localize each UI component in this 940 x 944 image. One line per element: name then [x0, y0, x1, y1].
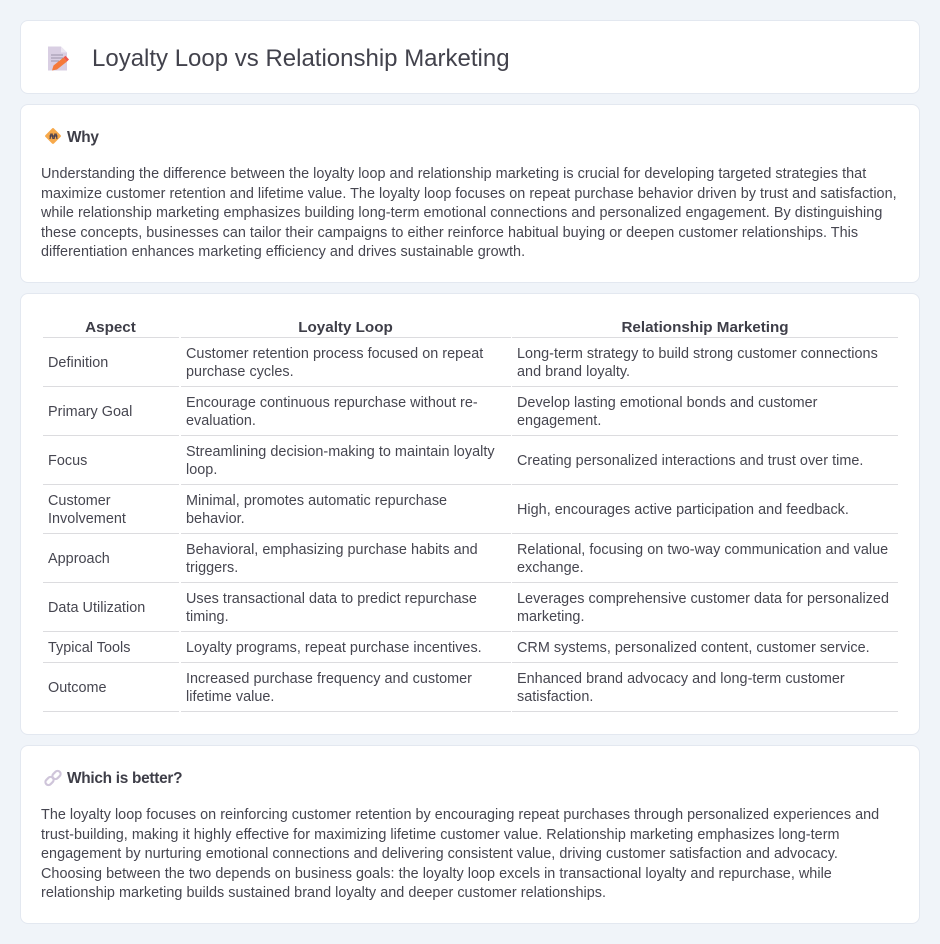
panel: comparison table: evaluation. [186, 413, 256, 429]
panel: comparison table: Increased purchase frequency and customer [186, 671, 472, 687]
row: approach: Approach [48, 551, 110, 567]
panel: comparison table: Uses transactional data to predict repurchase [186, 591, 477, 607]
panel: comparison table: Develop lasting emotional bonds and customer [517, 395, 818, 411]
panel: comparison table: Leverages comprehensive customer data for personalized [517, 591, 889, 607]
panel: title card [20, 20, 920, 94]
header: aspect: Aspect [85, 319, 136, 336]
which is better text: trust-building, making it highly effective for maximizing lifetime customer value. Relationship marketing emphasizes long-term [41, 827, 840, 843]
row: focus: Focus [48, 453, 87, 469]
panel: comparison table: Relational, focusing on two-way communication and value [517, 542, 888, 558]
header: relationship marketing: Relationship Marketing [621, 319, 789, 336]
panel: comparison table: Behavioral, emphasizing purchase habits and [186, 542, 478, 558]
panel: comparison table: loop. [186, 462, 217, 478]
why text: maximize customer retention and lifetime value. The loyalty loop focuses on repeat purchase behavior driven by trust and satisfaction, [41, 186, 897, 202]
icon: warning diamond [45, 128, 61, 144]
panel: comparison table: Loyalty programs, repeat purchase incentives. [186, 640, 482, 656]
row: typical tools: Typical Tools [48, 640, 131, 656]
row: primary goal: Primary Goal [48, 404, 132, 420]
why text: Understanding the difference between the loyalty loop and relationship marketing is crucial for developing targeted strategies that [41, 166, 866, 182]
panel: comparison table: Long-term strategy to build strong customer connections [517, 346, 878, 362]
heading: why: Why [67, 129, 99, 146]
header: loyalty loop: Loyalty Loop [298, 319, 393, 336]
row: customer involvement: Involvement [48, 511, 126, 527]
which is better text [41, 807, 879, 901]
panel: comparison table: triggers. [186, 560, 238, 576]
panel: comparison table: Creating personalized interactions and trust over time. [517, 453, 863, 469]
why text: while relationship marketing emphasizes building long-term emotional connections and personalized engagement. By distinguishing [41, 205, 882, 221]
which is better text: relationship marketing builds sustained brand loyalty and deeper customer relationships. [41, 885, 606, 901]
icon: memo with pencil [48, 46, 69, 70]
row: customer involvement [48, 493, 126, 527]
why text [41, 166, 897, 260]
icon: chain link [44, 770, 62, 786]
row: outcome: Outcome [48, 680, 107, 696]
why text: differentiation enhances marketing efficiency and drives sustainable growth. [41, 244, 525, 260]
panel: comparison table: purchase cycles. [186, 364, 294, 380]
which is better text: Choosing between the two depends on business goals: the loyalty loop excels in transactional loyalty and repurchase, while [41, 866, 832, 882]
panel: comparison table: exchange. [517, 560, 584, 576]
which is better text: engagement by nurturing emotional connections and delivering consistent value, driving customer satisfaction and advocacy. [41, 846, 838, 862]
table header row [85, 319, 789, 336]
panel: comparison table: and brand loyalty. [517, 364, 630, 380]
panel: comparison table: lifetime value. [186, 689, 274, 705]
panel: comparison table: satisfaction. [517, 689, 593, 705]
panel: comparison table: behavior. [186, 511, 245, 527]
panel: why [20, 104, 920, 283]
why text: these concepts, businesses can tailor their campaigns to either reinforce habitual buying or deepen customer relationships. This [41, 225, 858, 241]
panel: comparison table: CRM systems, personalized content, customer service. [517, 640, 870, 656]
panel: comparison table: timing. [186, 609, 229, 625]
panel: comparison table: Minimal, promotes automatic repurchase [186, 493, 447, 509]
row: customer involvement: Customer [48, 493, 111, 509]
panel: comparison table: Customer retention process focused on repeat [186, 346, 483, 362]
panel: which is better [20, 745, 920, 924]
panel: comparison table: High, encourages active participation and feedback. [517, 502, 849, 518]
row: definition: Definition [48, 355, 108, 371]
which is better text: The loyalty loop focuses on reinforcing customer retention by encouraging repeat purchases through personalized experiences and [41, 807, 879, 823]
panel: comparison table: marketing. [517, 609, 584, 625]
title: Loyalty Loop vs Relationship Marketing [92, 45, 510, 72]
panel: comparison table [20, 293, 920, 735]
row: data utilization: Data Utilization [48, 600, 145, 616]
heading: which is better: Which is better? [67, 770, 182, 787]
panel: comparison table: Encourage continuous repurchase without re- [186, 395, 478, 411]
panel: comparison table: Streamlining decision-making to maintain loyalty [186, 444, 495, 460]
panel: comparison table: engagement. [517, 413, 601, 429]
panel: comparison table: Enhanced brand advocacy and long-term customer [517, 671, 845, 687]
